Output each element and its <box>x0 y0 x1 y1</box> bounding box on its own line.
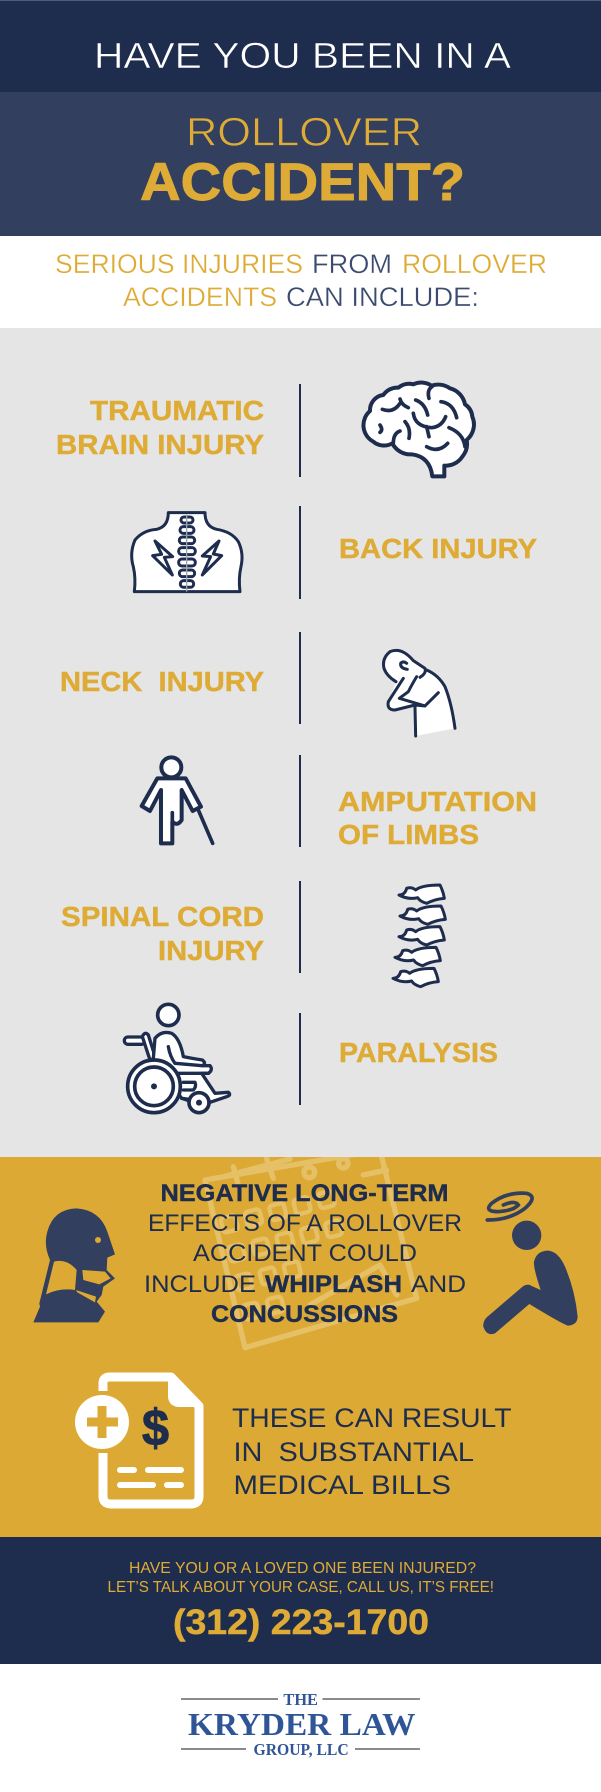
panel: long-term effects <box>0 1150 601 1537</box>
text: substantial medical bills <box>232 1403 512 1500</box>
text: substantial medical bills: MEDICAL BILLS <box>234 1470 451 1500</box>
text: substantial medical bills: IN SUBSTANTIAL <box>234 1437 474 1467</box>
heading: rollover: ROLLOVER <box>186 110 422 154</box>
subheading: serious injuries <box>55 249 547 312</box>
label: traumatic brain injury <box>56 395 264 460</box>
text: negative long-term effects: WHIPLASH <box>265 1271 402 1298</box>
text: negative long-term effects: AND <box>411 1271 466 1298</box>
icon: vertebrae <box>393 885 445 987</box>
icon: back with spine <box>132 513 242 592</box>
text: substantial medical bills: THESE CAN RESULT <box>232 1403 512 1433</box>
label: paralysis: PARALYSIS <box>339 1037 498 1068</box>
panel: call to action <box>0 1537 601 1664</box>
text: negative long-term effects: EFFECTS OF A ROLLOVER <box>148 1210 462 1237</box>
icon: dizzy person with spiral <box>483 1193 578 1334</box>
subheading: serious injuries: ROLLOVER <box>402 249 547 279</box>
logo: the kryder law group: GROUP, LLC <box>254 1740 349 1759</box>
icon: brain <box>363 383 474 476</box>
panel: injuries <box>0 328 601 1157</box>
watermark: faint document pattern <box>205 1150 417 1348</box>
label: amputation of limbs <box>338 786 537 850</box>
icon: medical bill <box>75 1375 203 1504</box>
label: amputation of limbs: AMPUTATION <box>338 786 537 817</box>
icon: medical bill: $ <box>142 1399 169 1456</box>
label: amputation of limbs: OF LIMBS <box>338 819 479 850</box>
label: back injury: BACK INJURY <box>339 533 537 564</box>
panel: title band <box>0 0 601 92</box>
label: traumatic brain injury: BRAIN INJURY <box>56 429 264 460</box>
text: negative long-term effects: CONCUSSIONS <box>211 1301 398 1328</box>
panel: rollover accident band <box>0 92 601 236</box>
logo: the kryder law group: KRYDER LAW <box>188 1706 416 1742</box>
label: spinal cord injury <box>61 901 264 966</box>
label: spinal cord injury: SPINAL CORD <box>61 901 264 932</box>
logo: the kryder law group: THE <box>283 1690 318 1709</box>
subheading: serious injuries: FROM <box>312 249 392 279</box>
label: neck injury: NECK INJURY <box>60 666 264 697</box>
subheading: serious injuries: ACCIDENTS <box>123 282 277 312</box>
icon: head with neck brace <box>33 1208 115 1322</box>
heading: accident: ACCIDENT? <box>140 153 465 212</box>
icon: person in wheelchair <box>124 1004 230 1113</box>
label: traumatic brain injury: TRAUMATIC <box>90 395 264 426</box>
subheading: serious injuries: CAN INCLUDE: <box>286 282 479 312</box>
text: call to action lines: LET’S TALK ABOUT YOUR CASE, CALL US, IT’S FREE! <box>108 1579 494 1596</box>
label: spinal cord injury: INJURY <box>158 935 264 966</box>
text: call to action lines <box>108 1560 494 1596</box>
divider lines <box>299 384 301 1105</box>
heading: have you been in a: HAVE YOU BEEN IN A <box>94 35 511 76</box>
subheading: serious injuries: SERIOUS INJURIES <box>55 249 303 279</box>
text: negative long-term effects: NEGATIVE LONG-TERM <box>160 1180 448 1207</box>
text: phone number: (312) 223-1700 <box>173 1603 429 1642</box>
icon: person holding neck <box>383 650 455 736</box>
text: negative long-term effects: ACCIDENT COULD <box>193 1240 417 1267</box>
text: negative long-term effects: INCLUDE <box>144 1271 256 1298</box>
text: call to action lines: HAVE YOU OR A LOVED ONE BEEN INJURED? <box>129 1560 476 1577</box>
text: negative long-term effects <box>144 1180 466 1328</box>
icon: amputee with crutch <box>142 757 213 843</box>
logo: the kryder law group <box>181 1690 420 1759</box>
